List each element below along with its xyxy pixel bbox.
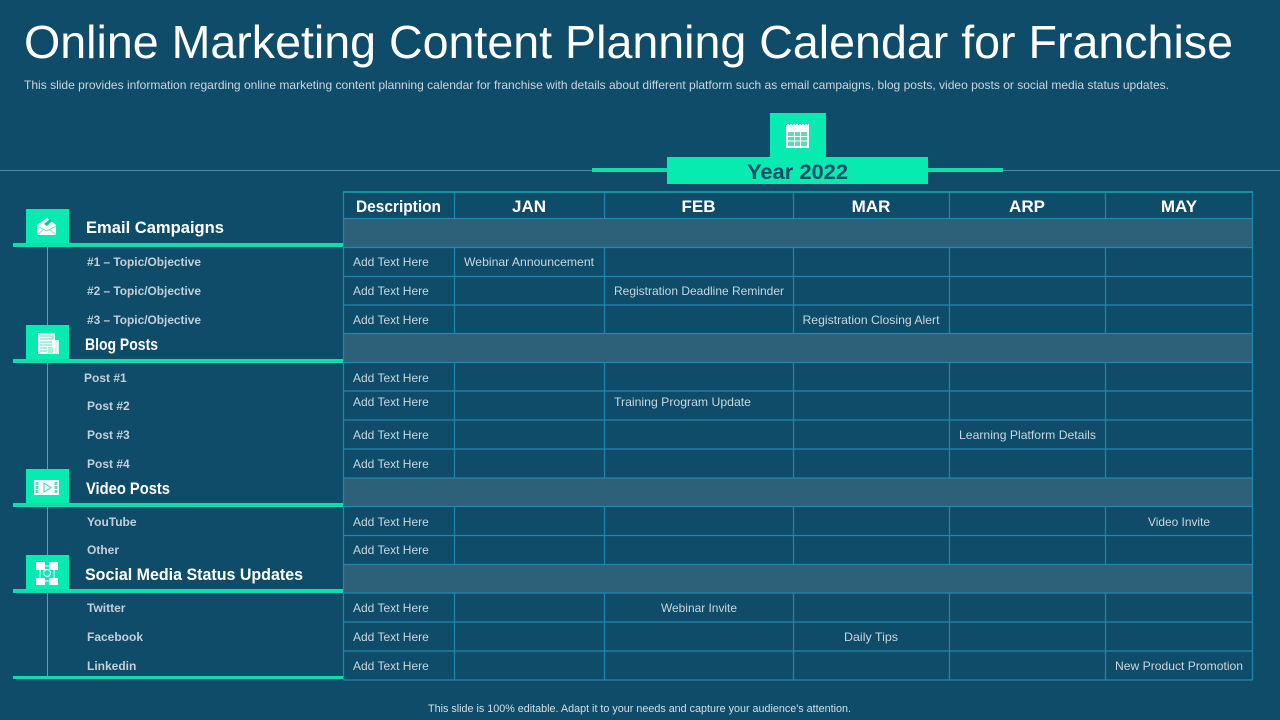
items: #2 – Topic/Objective	[87, 284, 201, 298]
table header row: FEB	[682, 197, 716, 216]
calendar entries: Video Invite	[1148, 515, 1210, 529]
items: Post #4	[87, 457, 130, 471]
icon: envelope	[37, 218, 56, 235]
icon: film strip	[34, 480, 59, 495]
items: #3 – Topic/Objective	[87, 313, 201, 327]
description column: Add Text Here	[353, 543, 429, 557]
description column: Add Text Here	[353, 284, 429, 298]
table header row: MAY	[1161, 197, 1198, 216]
calendar entries: Learning Platform Details	[959, 428, 1096, 442]
items: Post #1	[84, 371, 127, 385]
heading: Email Campaigns	[86, 218, 224, 237]
description column: Add Text Here	[353, 255, 429, 269]
heading: Blog Posts	[85, 335, 158, 354]
heading: Video Posts	[86, 479, 170, 498]
items: Twitter	[87, 601, 126, 615]
table header row: ARP	[1009, 197, 1045, 216]
year label: Year 2022	[747, 161, 848, 184]
heading: Social Media Status Updates	[85, 565, 303, 584]
description column: Add Text Here	[353, 601, 429, 615]
section: email campaigns	[13, 209, 343, 327]
subtitle text: This slide provides information regarding online marketing content planning calendar for franchise with details about different platform such as email campaigns, blog posts, video posts or social media status updates.	[24, 78, 1169, 92]
description column	[353, 255, 429, 673]
items: Other	[87, 543, 119, 557]
items: #1 – Topic/Objective	[87, 255, 201, 269]
description column: Add Text Here	[353, 515, 429, 529]
calendar entries: Training Program Update	[614, 395, 751, 409]
calendar entries: New Product Promotion	[1115, 659, 1243, 673]
items	[87, 601, 143, 673]
items	[84, 371, 130, 471]
items: Linkedin	[87, 659, 136, 673]
description column: Add Text Here	[353, 428, 429, 442]
section: social media status updates	[13, 555, 343, 673]
calendar entries: Webinar Announcement	[464, 255, 595, 269]
section: blog posts	[13, 325, 343, 471]
description column: Add Text Here	[353, 371, 429, 385]
table header row	[356, 197, 1198, 216]
title: Online Marketing Content Planning Calendar for Franchise	[24, 16, 1233, 68]
items: YouTube	[87, 515, 137, 529]
year header banner	[592, 113, 1003, 184]
table header row: MAR	[852, 197, 890, 216]
description column: Add Text Here	[353, 395, 429, 409]
icon: calendar	[786, 124, 809, 148]
left timeline rail	[46, 245, 48, 678]
calendar entries: Daily Tips	[844, 630, 898, 644]
footer note: This slide is 100% editable. Adapt it to your needs and capture your audience's attention.	[428, 703, 851, 715]
calendar entries	[464, 255, 1243, 673]
items: Facebook	[87, 630, 143, 644]
calendar entries: Webinar Invite	[661, 601, 737, 615]
items: Post #3	[87, 428, 130, 442]
calendar entries: Registration Closing Alert	[802, 313, 940, 327]
description column: Add Text Here	[353, 630, 429, 644]
icon: social network	[36, 562, 58, 585]
items: Post #2	[87, 399, 130, 413]
calendar table	[343, 192, 1253, 680]
description column: Add Text Here	[353, 659, 429, 673]
table header row: Description	[356, 197, 441, 216]
description column: Add Text Here	[353, 313, 429, 327]
description column: Add Text Here	[353, 457, 429, 471]
items	[87, 515, 137, 557]
icon: newspaper	[38, 333, 59, 354]
items	[87, 255, 201, 327]
section band rows	[344, 219, 1252, 593]
calendar entries: Registration Deadline Reminder	[614, 284, 784, 298]
section: video posts	[13, 469, 343, 557]
table header row: JAN	[512, 197, 546, 216]
